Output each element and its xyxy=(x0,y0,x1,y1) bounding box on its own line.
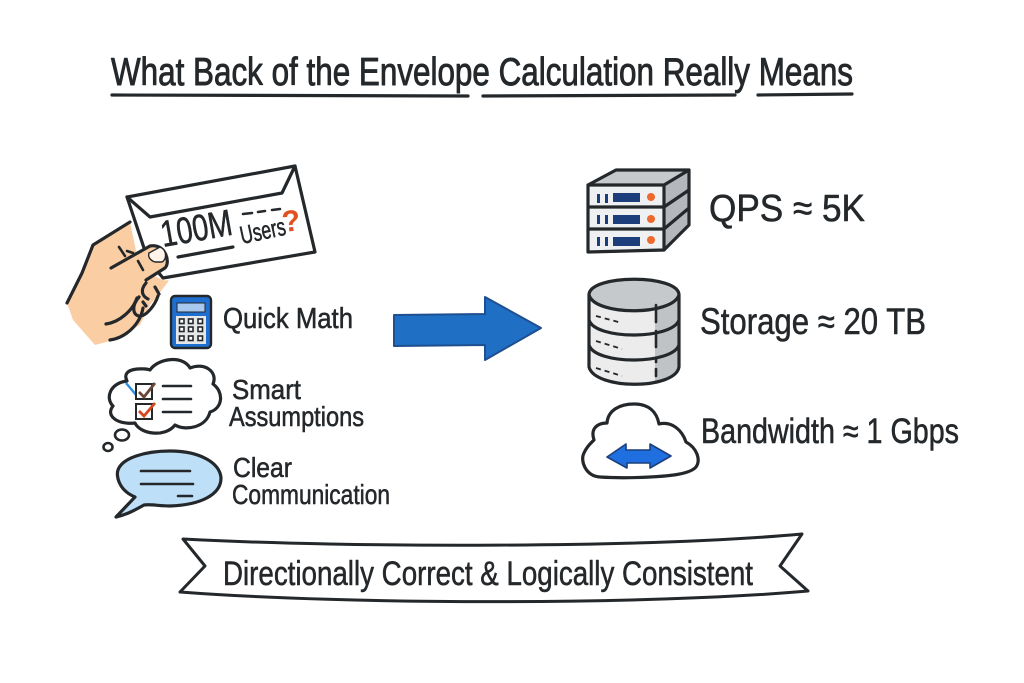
icon: database xyxy=(589,279,679,384)
label: smart assumptions: Assumptions xyxy=(229,401,364,432)
icon: server rack xyxy=(588,170,689,252)
label: clear communication: Communication xyxy=(232,479,390,510)
envelope xyxy=(127,166,315,278)
banner: Directionally Correct & Logically Consistent xyxy=(223,555,753,593)
label: bandwidth: Bandwidth ≈ 1 Gbps xyxy=(701,412,959,451)
label: quick math: Quick Math xyxy=(223,303,353,335)
label: clear communication: Clear xyxy=(233,452,292,483)
hand xyxy=(67,222,168,345)
icon: cloud with double arrow xyxy=(583,404,698,478)
label: storage: Storage ≈ 20 TB xyxy=(700,301,926,342)
icon: calculator xyxy=(171,296,211,348)
arrow: blue xyxy=(394,297,541,360)
title: What Back of the Envelope Calculation Really Means xyxy=(111,51,853,94)
label: smart assumptions: Smart xyxy=(232,374,301,405)
icon: thought bubble with checklist xyxy=(104,360,221,451)
icon: hand holding envelope xyxy=(67,166,315,345)
100M: 100M xyxy=(157,202,235,255)
fingers xyxy=(146,280,169,298)
label: clear communication xyxy=(232,452,390,510)
icon: speech bubble xyxy=(116,451,221,517)
thumb xyxy=(110,246,167,280)
icon: hand holding envelope: ? xyxy=(280,204,302,239)
Users: Users xyxy=(237,213,288,250)
label: qps: QPS ≈ 5K xyxy=(709,188,865,230)
banner xyxy=(180,534,808,602)
label: smart assumptions xyxy=(229,374,364,432)
